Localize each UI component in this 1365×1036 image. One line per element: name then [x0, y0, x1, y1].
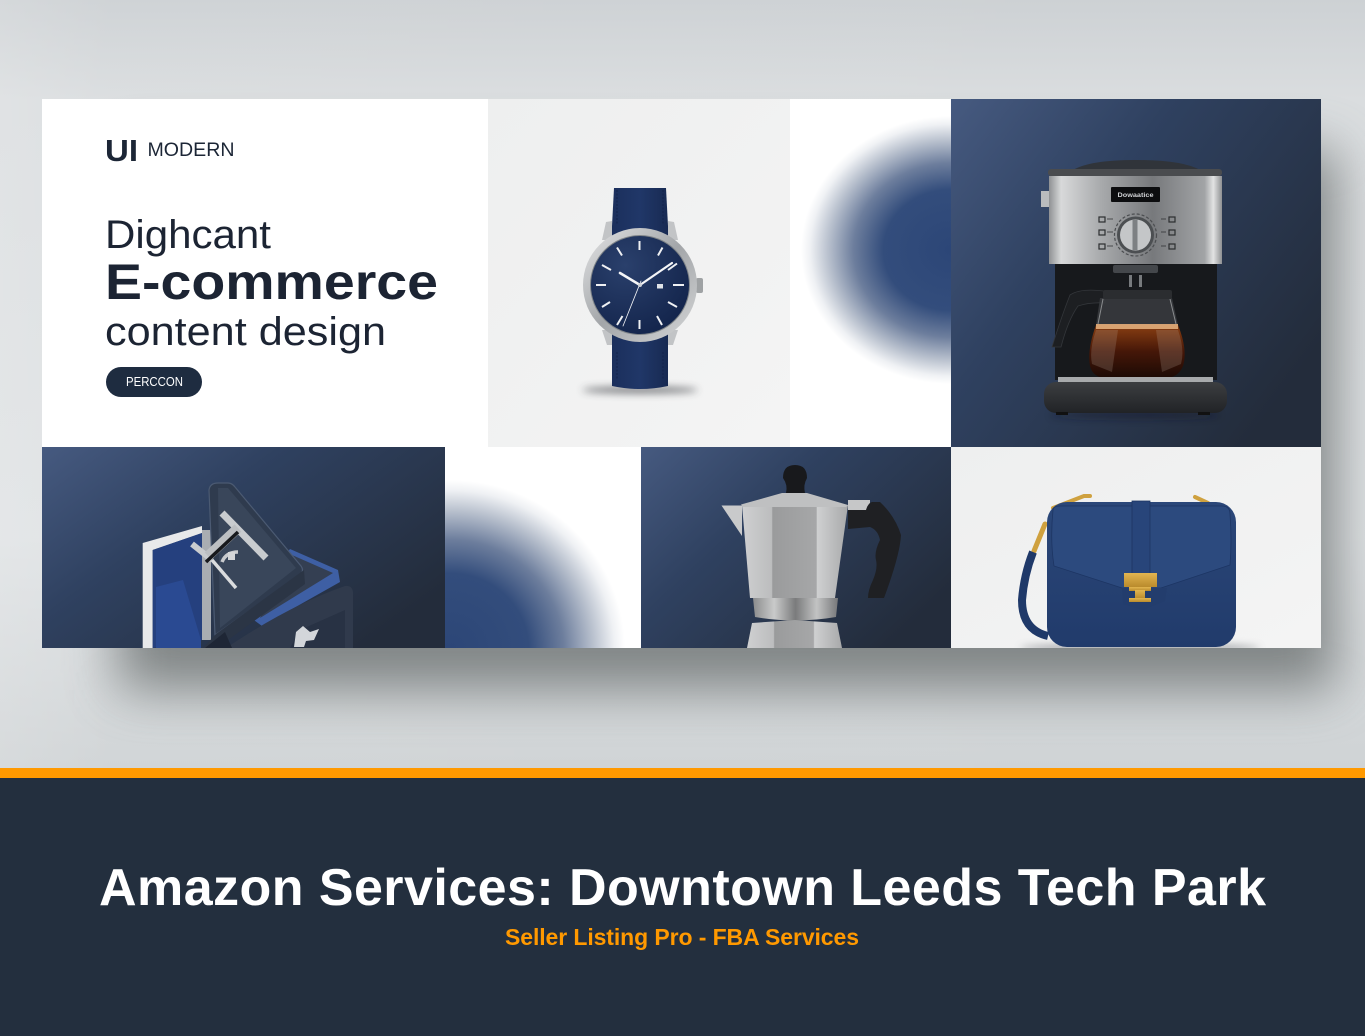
control buttons — [1099, 217, 1175, 249]
page background — [0, 0, 1365, 768]
icon: coffee machine — [1041, 160, 1227, 418]
orange accent bar — [0, 768, 1365, 778]
banner panel — [42, 99, 1321, 648]
footer band — [0, 778, 1365, 1036]
watch indices — [596, 241, 684, 329]
carafe handle — [1052, 290, 1105, 347]
decorative blue glow lower — [445, 485, 620, 648]
panel: blurred gradient upper — [790, 99, 951, 447]
panel: coffee machine — [951, 99, 1321, 447]
machine base — [1058, 377, 1213, 383]
decorative blue glow — [806, 120, 951, 380]
silver logo fragment — [294, 626, 319, 647]
subtitle: Seller Listing Pro - FBA Services — [505, 924, 859, 950]
brand logo — [105, 133, 234, 168]
headline: Dighcant — [105, 213, 271, 257]
gold clasp — [1124, 573, 1157, 602]
panel drop shadow — [118, 150, 1336, 690]
chrome emblem — [192, 513, 266, 588]
icon: moka pot — [722, 465, 901, 648]
panel: watch — [488, 99, 790, 447]
button pill — [106, 367, 202, 397]
panel: headline card — [42, 99, 488, 447]
pot handle — [848, 502, 901, 598]
panel: boxed product — [42, 447, 445, 648]
panel: blurred gradient lower — [445, 447, 641, 648]
bag chain — [1034, 496, 1208, 551]
button pill: PERCCON — [126, 375, 183, 389]
watch hands — [620, 263, 672, 326]
panel: moka pot — [641, 447, 951, 648]
headline: content design — [105, 310, 386, 354]
headline: E-commerce — [105, 254, 438, 310]
title: Amazon Services: Downtown Leeds Tech Park — [99, 859, 1266, 917]
carafe — [1096, 298, 1178, 325]
brand logo: MODERN — [148, 139, 234, 161]
icon: open box with chrome emblem — [143, 483, 353, 648]
icon: handbag — [1020, 496, 1260, 652]
brand logo: UI — [105, 133, 138, 168]
icon: watch — [582, 188, 703, 394]
panel: handbag — [951, 447, 1321, 652]
control knob — [1114, 214, 1156, 256]
icon: coffee machine: Dowaatice — [1118, 192, 1154, 199]
headline — [105, 213, 438, 354]
